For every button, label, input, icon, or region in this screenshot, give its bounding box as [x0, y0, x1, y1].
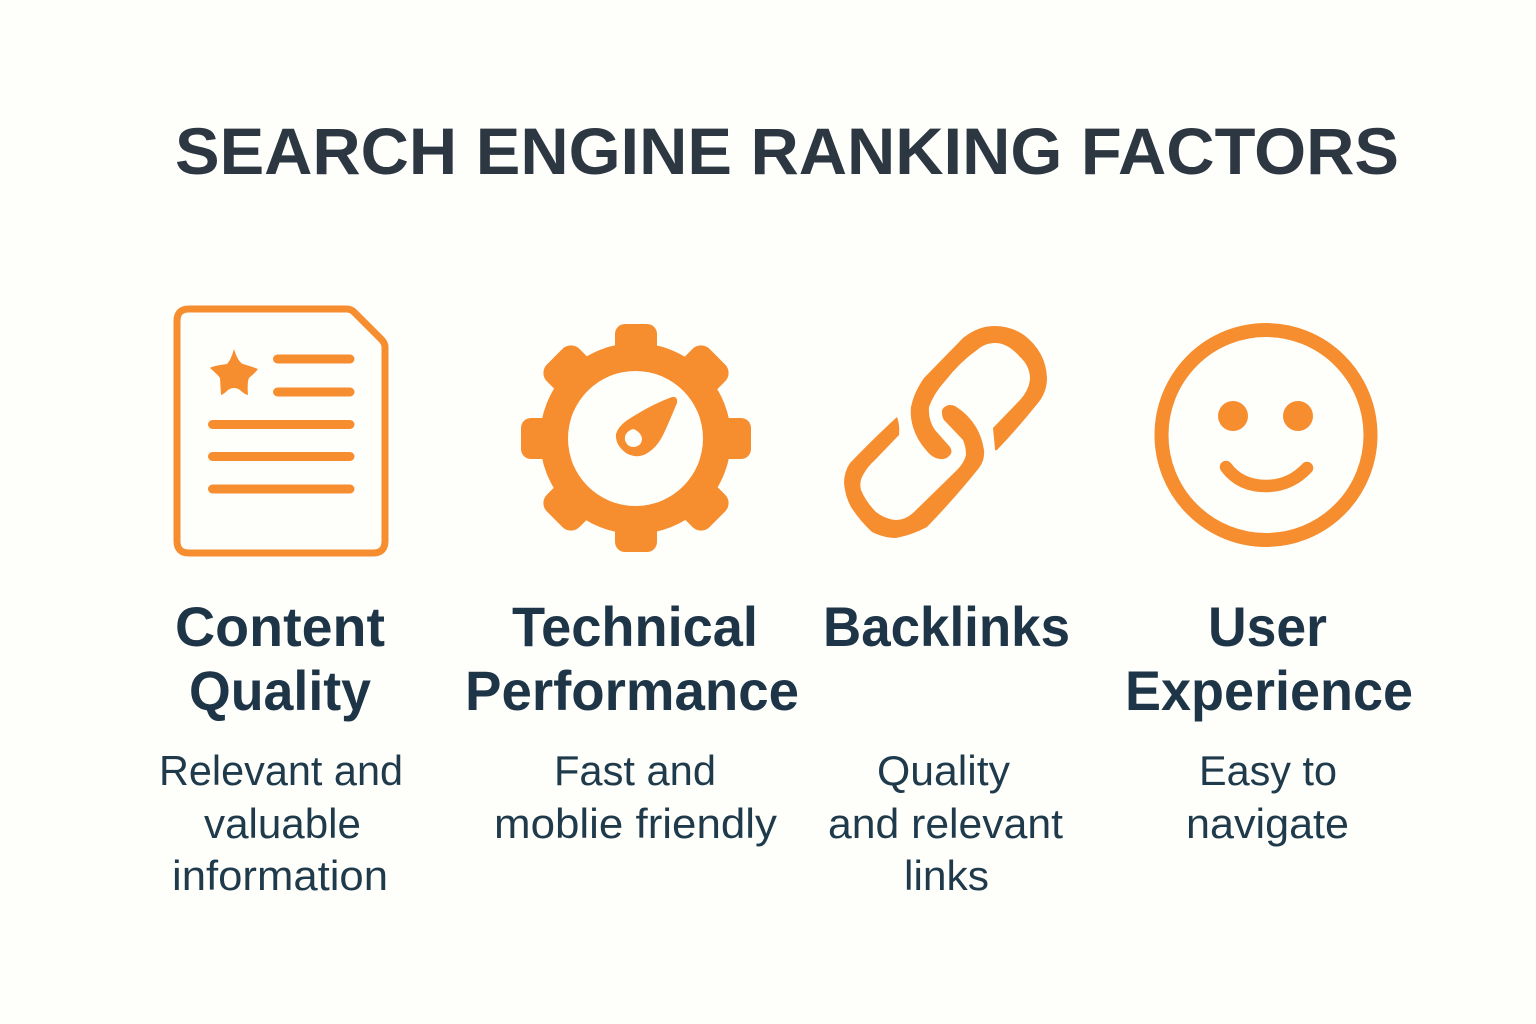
heading: user experience: User: [1208, 595, 1327, 658]
description: content quality: Relevant and: [159, 747, 403, 794]
description: backlinks: Quality: [877, 747, 1010, 794]
icon: gear with gauge needle: [521, 324, 751, 552]
title: SEARCH ENGINE RANKING FACTORS: [175, 114, 1399, 188]
panel: technical performance: [465, 324, 799, 847]
description: technical performance: [494, 747, 777, 847]
description: backlinks: links: [904, 852, 989, 899]
panel: user experience: [1125, 330, 1413, 847]
heading: content quality: Content: [175, 595, 385, 658]
description: user experience: [1186, 747, 1349, 847]
icon: smiley face: [1162, 330, 1370, 540]
heading: content quality: [175, 595, 385, 722]
description: technical performance: moblie friendly: [494, 800, 777, 847]
heading: content quality: Quality: [189, 659, 371, 722]
heading: technical performance: [465, 595, 799, 722]
description: content quality: valuable: [204, 800, 361, 847]
heading: user experience: [1125, 595, 1413, 722]
icon: chain link: [844, 326, 1047, 538]
heading: technical performance: Performance: [465, 659, 799, 722]
icon: document with star: [177, 309, 385, 553]
heading: user experience: Experience: [1125, 659, 1413, 722]
description: technical performance: Fast and: [554, 747, 716, 794]
description: backlinks: [828, 747, 1063, 899]
description: content quality: [159, 747, 403, 899]
description: content quality: information: [172, 852, 388, 899]
description: user experience: Easy to: [1199, 747, 1337, 794]
heading: backlinks: Backlinks: [823, 595, 1070, 658]
heading: technical performance: Technical: [512, 595, 758, 658]
panel: backlinks: [823, 326, 1070, 899]
description: user experience: navigate: [1186, 800, 1349, 847]
description: backlinks: and relevant: [828, 800, 1063, 847]
panel: content quality: [159, 309, 403, 899]
